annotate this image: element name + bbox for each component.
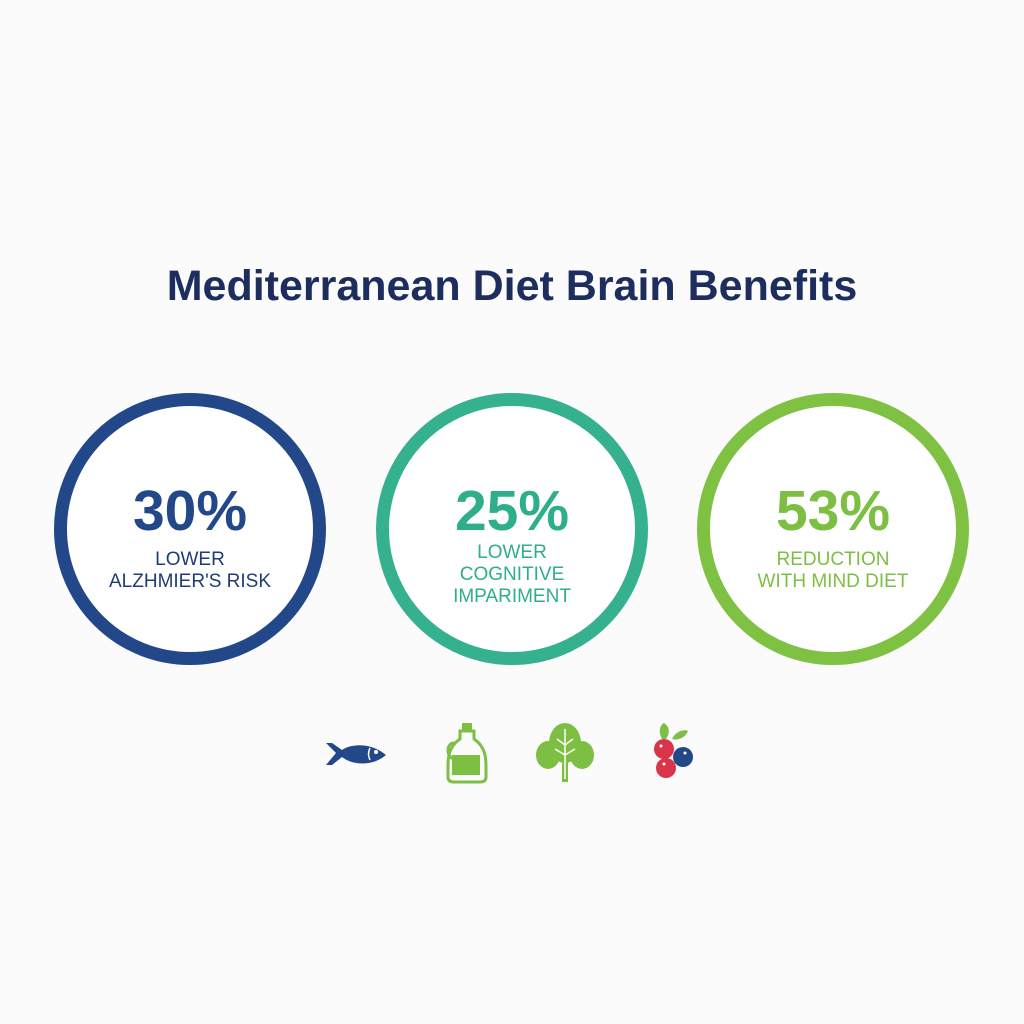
stat label: REDUCTION [777, 549, 889, 570]
stat label: COGNITIVE [460, 564, 564, 585]
icons row [326, 723, 693, 784]
stat number: 53% [776, 479, 890, 543]
stat label: LOWER [477, 542, 547, 563]
stat label [453, 542, 571, 607]
stat number: 25% [455, 479, 569, 543]
icon: fish [326, 743, 386, 765]
panel: 53% stat [697, 393, 969, 665]
stat label [109, 549, 271, 592]
icon: berries [654, 723, 693, 778]
stat label: LOWER [155, 549, 225, 570]
icon: olive oil bottle [448, 723, 486, 782]
title: Mediterranean Diet Brain Benefits [167, 262, 857, 310]
icon: spinach [536, 723, 594, 782]
stat label: IMPARIMENT [453, 586, 571, 607]
panel: 30% stat [54, 393, 326, 665]
stat label: WITH MIND DIET [758, 571, 908, 592]
stat number: 30% [133, 479, 247, 543]
stat label [758, 549, 908, 592]
panel: 25% stat [376, 393, 648, 665]
stat label: ALZHMIER'S RISK [109, 571, 271, 592]
